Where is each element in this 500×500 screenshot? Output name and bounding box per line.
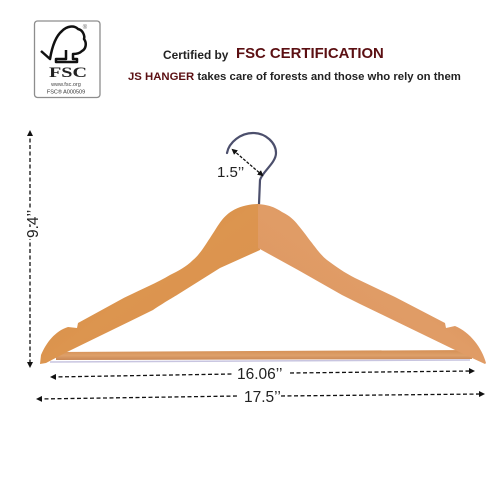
hanger bbox=[40, 133, 486, 364]
arrow: hook width bbox=[233, 150, 262, 175]
FSC wordmark: FSC bbox=[49, 65, 87, 81]
logo border bbox=[34, 21, 100, 98]
heading: FSC certification: FSC CERTIFICATION bbox=[236, 46, 384, 62]
right arm bbox=[258, 204, 486, 364]
pant bar bbox=[56, 350, 472, 360]
label: hook 1.5: 1.5’’ bbox=[217, 164, 244, 181]
arrow: total width left bbox=[38, 396, 238, 399]
label: total width 17.5: 17.5’’ bbox=[244, 389, 281, 406]
icon: FSC check tree bbox=[41, 27, 86, 62]
bar shadow bbox=[50, 360, 470, 362]
arrow: bar width right bbox=[290, 371, 473, 373]
arrow: total width right bbox=[281, 394, 483, 396]
arrow: height bbox=[29, 132, 31, 366]
hook bbox=[227, 133, 276, 204]
FSC website: www.fsc.org bbox=[50, 82, 81, 88]
heading: certified by FSC: Certified by bbox=[163, 48, 229, 62]
FSC logo bbox=[34, 21, 100, 98]
label: bar width 16.06: 16.06’’ bbox=[237, 366, 282, 383]
arrow: bar width left bbox=[52, 374, 232, 377]
label: height 9.4: 9.4’’ bbox=[25, 210, 42, 238]
tagline: JS HANGER takes care of forests and those who rely on them bbox=[128, 71, 461, 83]
left arm bbox=[40, 204, 260, 364]
FSC licence code: FSC® A000509 bbox=[47, 88, 85, 96]
registered mark: ® bbox=[83, 24, 88, 31]
